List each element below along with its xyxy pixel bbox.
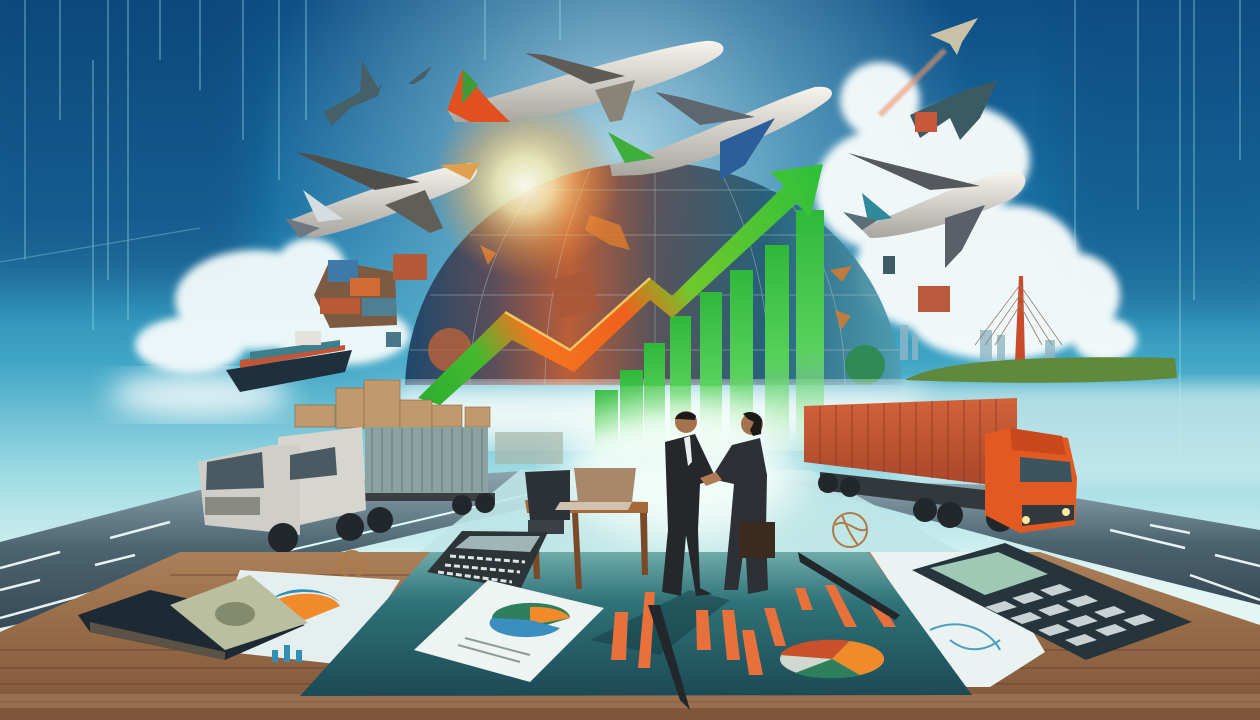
mat shadows (590, 590, 730, 655)
wooden table (0, 552, 1260, 720)
plane centre right (608, 87, 832, 180)
plane left (285, 152, 480, 238)
right paper (870, 552, 1045, 687)
horizon haze (390, 385, 920, 445)
pens (648, 552, 900, 710)
plane right (843, 153, 1025, 268)
calculator centre (427, 531, 548, 590)
clouds left (110, 238, 410, 419)
plane top centre (447, 41, 724, 123)
central floor light (420, 470, 960, 552)
floating containers (314, 254, 950, 347)
report with pie chart (414, 580, 604, 682)
sun glow (430, 90, 620, 280)
right truck (804, 398, 1077, 533)
left paper (210, 570, 400, 665)
cargo ship (226, 331, 352, 392)
businessman right (700, 412, 775, 594)
growth arrow (418, 164, 823, 405)
notebook and cash (78, 575, 308, 660)
left road (0, 470, 590, 628)
globe (405, 162, 902, 385)
small plane top right and trail (880, 18, 978, 115)
white centre light (560, 400, 800, 540)
clouds right (815, 62, 1137, 362)
desk and laptop (525, 468, 648, 589)
right road (780, 480, 1260, 605)
pie chart on mat (780, 640, 884, 678)
left truck (198, 380, 563, 553)
right bridge and skyline (900, 276, 1177, 383)
small cargo plane right (910, 80, 998, 140)
wire ornaments (339, 513, 867, 577)
calculator right (912, 543, 1192, 660)
main chart mat (300, 552, 972, 696)
green bar chart (595, 210, 824, 460)
sea and horizon right (900, 385, 1260, 485)
small planes top left (323, 60, 432, 126)
businessman left (662, 411, 716, 596)
handshake businessmen (662, 411, 775, 596)
